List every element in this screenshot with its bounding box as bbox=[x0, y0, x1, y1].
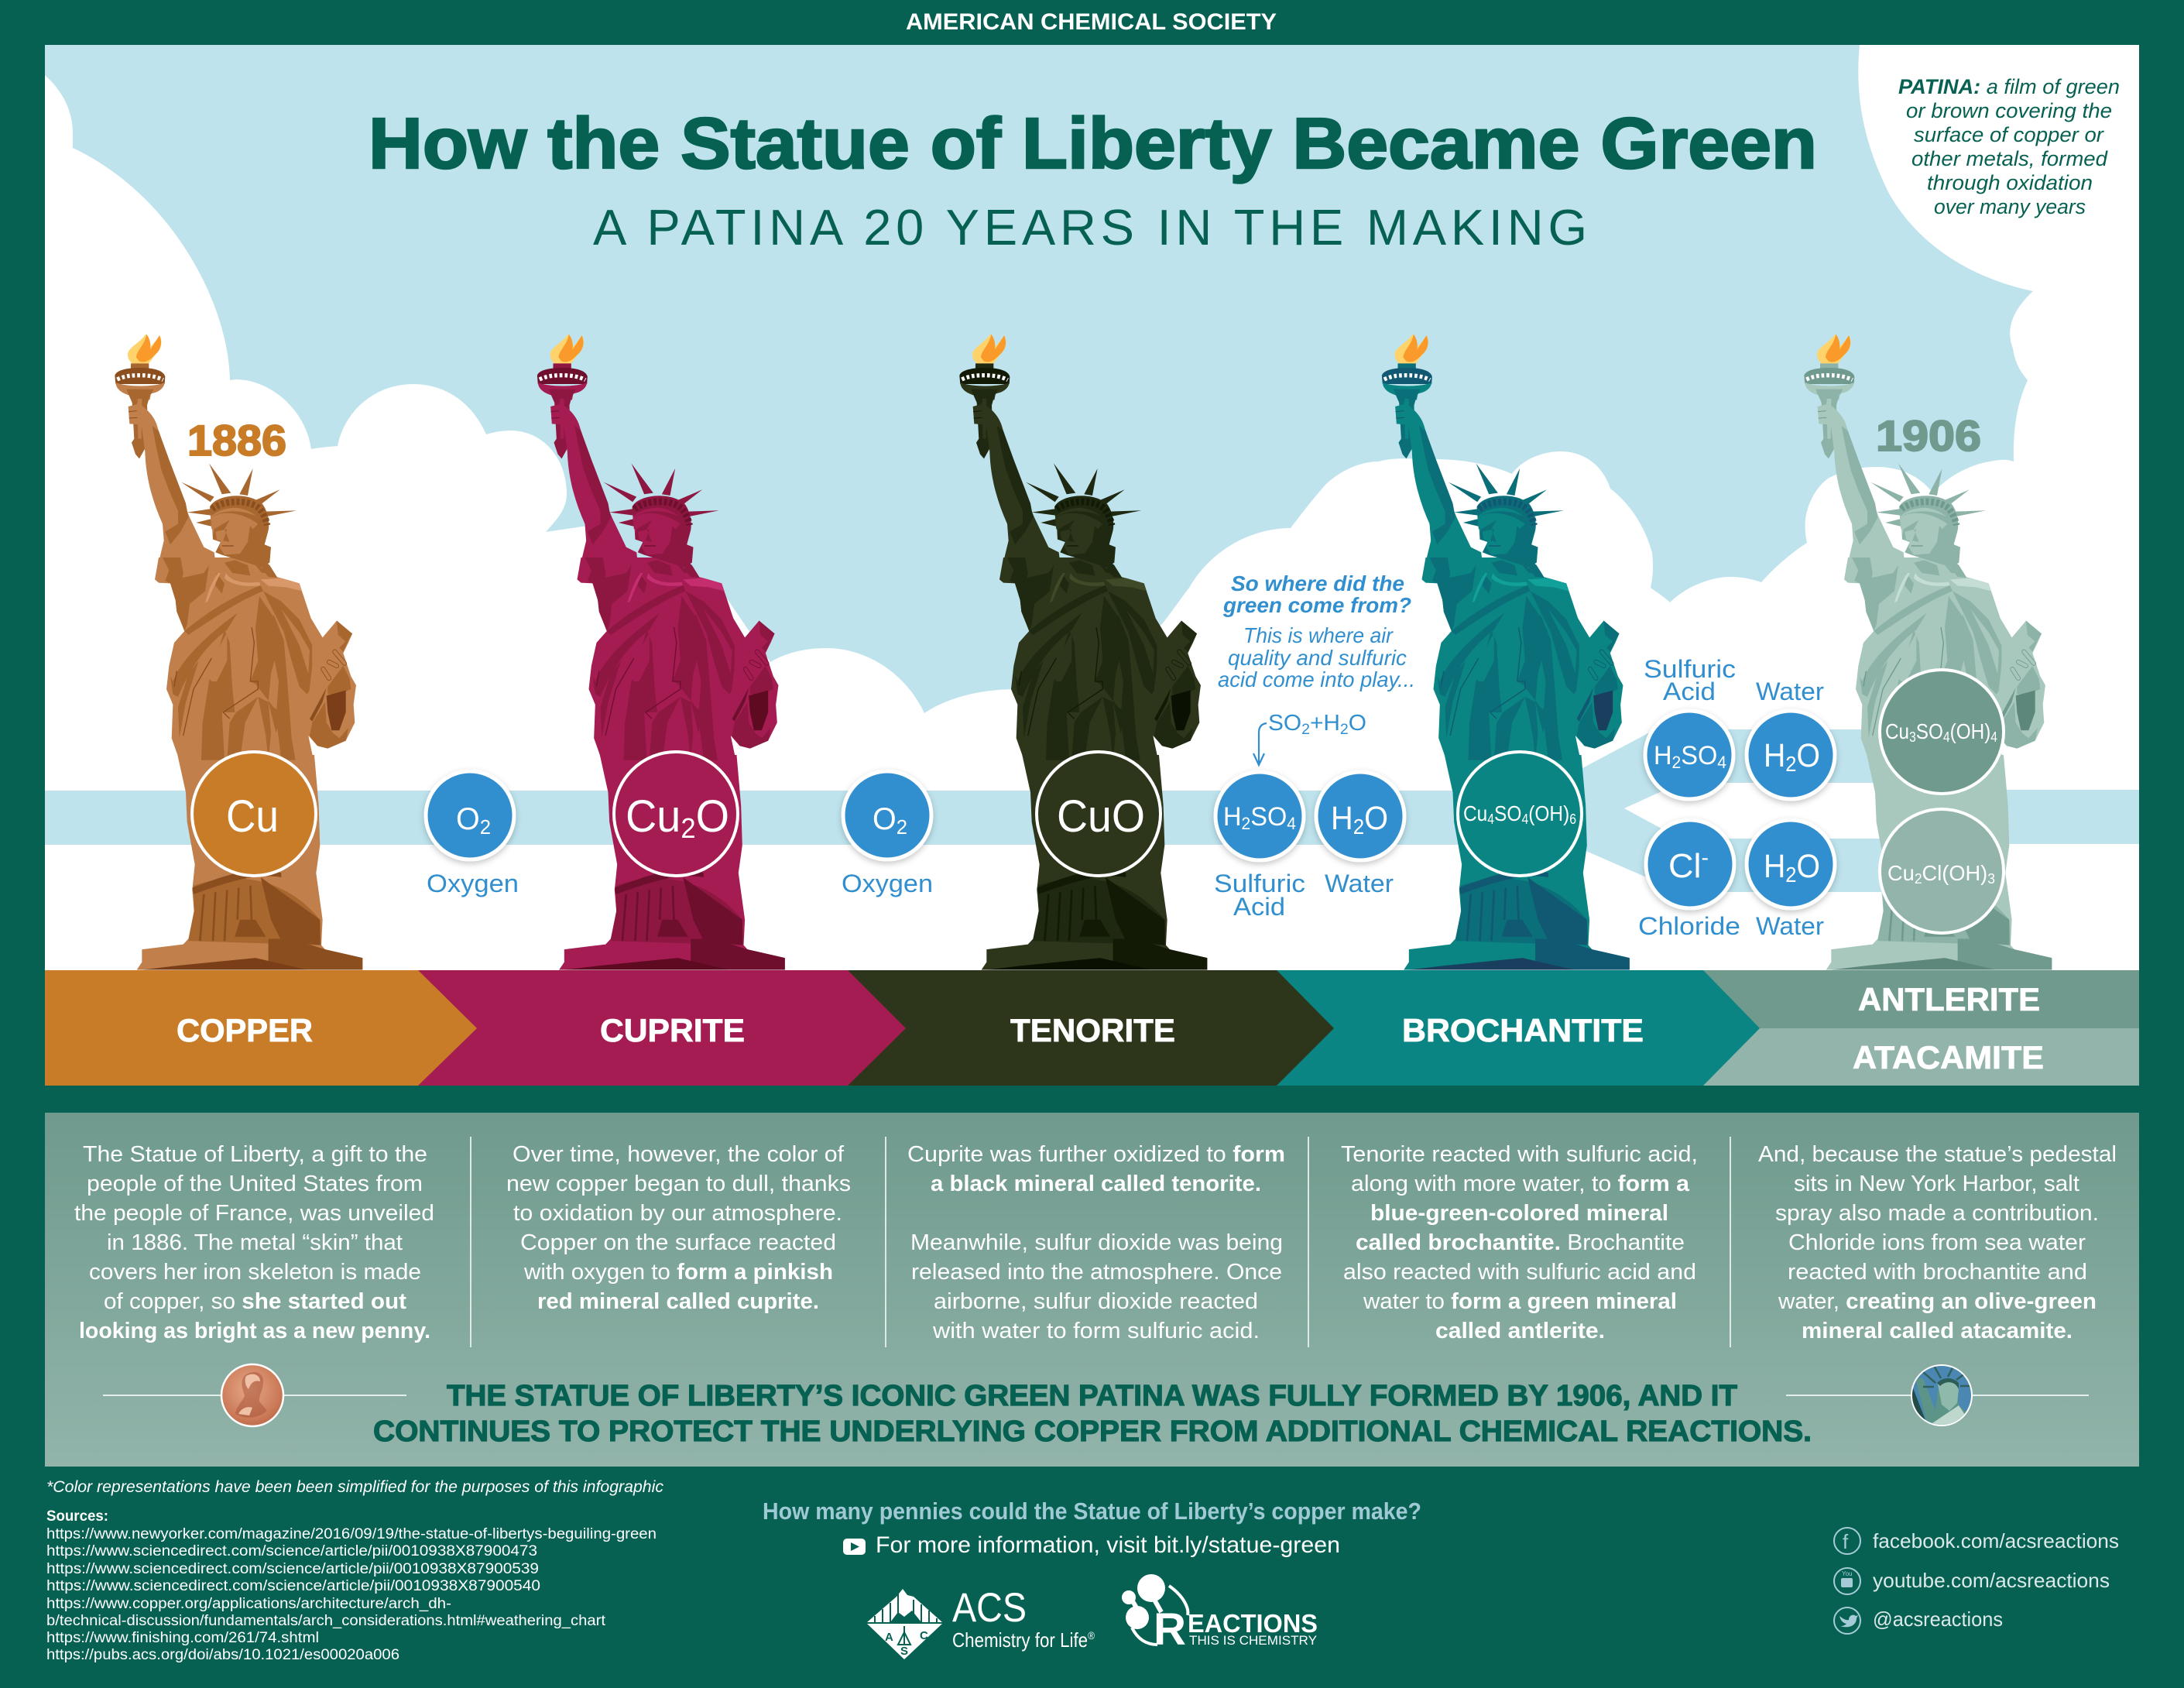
callout: where did the green come from: green come from? bbox=[1222, 593, 1411, 617]
text block: brochantite: Tenorite reacted with sulfuric acid, bbox=[1341, 1142, 1698, 1167]
reactants: chloride and water, lower: Chloride bbox=[1638, 912, 1740, 940]
reactant: oxygen 2 bbox=[842, 771, 933, 897]
element circle: Cu: Cu bbox=[226, 791, 279, 842]
logo: ACS: ® bbox=[1088, 1629, 1095, 1642]
logo: Reactions bbox=[1122, 1574, 1318, 1655]
sources: Sources: bbox=[46, 1508, 108, 1525]
year 1906: 1906 bbox=[1876, 411, 1981, 460]
title: How the Statue of Liberty Became Green bbox=[369, 103, 1817, 184]
text block: cuprite: to oxidation by our atmosphere. bbox=[513, 1201, 842, 1226]
element circle: atacamite formula: 2 bbox=[1915, 871, 1922, 887]
text block: atacamite: reacted with brochantite and bbox=[1788, 1260, 2087, 1285]
text block: brochantite: water to form a green mineral bbox=[1363, 1289, 1677, 1314]
element circle: brochantite formula: 4 bbox=[1521, 811, 1528, 827]
arrow: tenorite bbox=[813, 970, 1334, 1086]
text block: atacamite: Chloride ions from sea water bbox=[1788, 1230, 2086, 1255]
reactants: sulfuric acid and water: 2 bbox=[1242, 814, 1250, 833]
arrow: SO2 + H2O to sulfuric acid: O bbox=[1349, 711, 1366, 736]
callout: where did the green come from: acid come into play... bbox=[1218, 667, 1415, 691]
element circle: brochantite formula: SO bbox=[1494, 801, 1521, 825]
element circle: Cu2O: O bbox=[696, 791, 729, 842]
reactants: chloride and water, lower bbox=[1638, 820, 1835, 940]
reactants: sulfuric acid and water: 4 bbox=[1287, 814, 1296, 833]
logo: Reactions: THIS IS CHEMISTRY bbox=[1189, 1633, 1317, 1648]
text block: copper: looking as bright as a new penny. bbox=[79, 1319, 430, 1343]
reactants: sulfuric acid and water, upper: 2 bbox=[1785, 752, 1797, 776]
text block: tenorite: Meanwhile, sulfur dioxide was being bbox=[910, 1230, 1283, 1255]
arrow: cuprite bbox=[387, 970, 906, 1086]
reactants: sulfuric acid and water, upper: Water bbox=[1756, 678, 1824, 705]
icon: statue photo with rule bbox=[1786, 1364, 2089, 1426]
footnote: *Color representations have been been simplified for the purposes of this infographic bbox=[46, 1478, 663, 1496]
element circle: antlerite formula bbox=[1880, 670, 2004, 794]
element circle: CuO bbox=[1037, 752, 1161, 876]
reactants: sulfuric acid and water: H bbox=[1223, 802, 1243, 832]
element circle: atacamite formula: Cl(OH) bbox=[1922, 861, 1987, 885]
reactants: sulfuric acid and water, upper: H bbox=[1764, 737, 1788, 774]
reactants: chloride and water, lower: Cl bbox=[1668, 847, 1701, 885]
text block: copper: in 1886. The metal “skin” that bbox=[107, 1230, 403, 1255]
reactant: oxygen 2: O bbox=[873, 802, 897, 836]
reactants: chloride and water, lower: H bbox=[1764, 848, 1788, 885]
year 1886: 1886 bbox=[187, 416, 286, 465]
reactants: sulfuric acid and water, upper: Sulfuric bbox=[1644, 655, 1736, 683]
sources: https://www.finishing.com/261/74.shtml bbox=[46, 1630, 319, 1646]
text block: brochantite bbox=[1341, 1142, 1698, 1343]
text block: cuprite: with oxygen to form a pinkish bbox=[523, 1260, 833, 1285]
reactants: sulfuric acid and water, upper: Acid bbox=[1663, 678, 1716, 705]
callout: patina definition bbox=[1898, 75, 2120, 218]
statue: antlerite and atacamite bbox=[1804, 335, 2052, 969]
social: youtube: You bbox=[1842, 1570, 1852, 1577]
callout: patina definition: other metals, formed bbox=[1911, 147, 2108, 170]
reactants: sulfuric acid and water, upper: H bbox=[1654, 741, 1673, 770]
reactant: oxygen 1: O bbox=[456, 802, 480, 836]
conclusion statement bbox=[373, 1380, 1812, 1448]
more information link with play icon: For more information, visit bit.ly/statue-green bbox=[876, 1532, 1340, 1558]
text block: copper bbox=[74, 1142, 434, 1343]
text block: tenorite bbox=[907, 1142, 1285, 1343]
sources: b/technical-discussion/fundamentals/arch_considerations.html#weathering_chart bbox=[46, 1613, 606, 1629]
reactant: oxygen 1: 2 bbox=[480, 815, 491, 839]
conclusion statement: CONTINUES TO PROTECT THE UNDERLYING COPPER FROM ADDITIONAL CHEMICAL REACTIONS. bbox=[373, 1415, 1812, 1448]
text block: tenorite: airborne, sulfur dioxide reacted bbox=[934, 1289, 1258, 1314]
element circle: Cu2O: Cu bbox=[626, 791, 683, 842]
reactant: oxygen 1 bbox=[426, 771, 519, 897]
reactants: sulfuric acid and water, upper: SO bbox=[1681, 741, 1717, 770]
text block: brochantite: called antlerite. bbox=[1435, 1319, 1605, 1343]
logo: ACS: A bbox=[885, 1631, 893, 1644]
element circle: antlerite formula: Cu bbox=[1885, 719, 1913, 743]
reactants: sulfuric acid and water, upper: O bbox=[1797, 737, 1820, 774]
icon: penny with rule bbox=[103, 1364, 406, 1426]
callout: patina definition: PATINA: a film of green bbox=[1898, 75, 2120, 98]
element circle: brochantite formula bbox=[1458, 752, 1582, 876]
callout: where did the green come from: quality and sulfuric bbox=[1228, 646, 1407, 670]
statue: cuprite bbox=[537, 335, 785, 969]
callout: patina definition: surface of copper or bbox=[1914, 123, 2104, 146]
reactants: chloride and water, lower: Water bbox=[1756, 912, 1824, 940]
element circle: Cu2O: 2 bbox=[681, 812, 696, 844]
callout: patina definition: through oxidation bbox=[1927, 171, 2093, 194]
element circle: antlerite formula: SO bbox=[1916, 719, 1943, 743]
element circle: atacamite formula: Cu bbox=[1887, 861, 1915, 885]
text block: cuprite: Over time, however, the color of bbox=[513, 1142, 845, 1167]
label: CUPRITE: CUPRITE bbox=[600, 1012, 745, 1048]
sources: https://www.sciencedirect.com/science/article/pii/0010938X87900540 bbox=[46, 1578, 540, 1594]
callout: patina definition: over many years bbox=[1934, 195, 2086, 218]
arrow: SO2 + H2O to sulfuric acid: 2 bbox=[1301, 722, 1310, 738]
sources bbox=[46, 1508, 657, 1663]
reactants: sulfuric acid and water: H bbox=[1331, 800, 1355, 837]
element circle: Cu bbox=[192, 752, 316, 876]
panel: explanation bbox=[45, 1113, 2139, 1467]
logo: ACS: S bbox=[900, 1645, 908, 1658]
element circle: CuO: CuO bbox=[1057, 791, 1145, 842]
social: facebook: facebook.com/acsreactions bbox=[1873, 1529, 2119, 1552]
sources: https://www.sciencedirect.com/science/article/pii/0010938X87900539 bbox=[46, 1561, 539, 1577]
text block: tenorite: a black mineral called tenorite. bbox=[931, 1172, 1261, 1196]
sources: https://www.sciencedirect.com/science/article/pii/0010938X87900473 bbox=[46, 1543, 537, 1559]
text block: brochantite: blue-green-colored mineral bbox=[1370, 1201, 1668, 1226]
element circle: brochantite formula: 4 bbox=[1487, 811, 1494, 827]
reactants: sulfuric acid and water bbox=[1214, 772, 1404, 921]
text block: copper: people of the United States from bbox=[87, 1172, 423, 1196]
element circle: atacamite formula: 3 bbox=[1987, 871, 1995, 887]
logo: ACS bbox=[867, 1585, 1095, 1659]
reactant: oxygen 1: Oxygen bbox=[427, 870, 519, 897]
reactants: sulfuric acid and water: Acid bbox=[1233, 893, 1285, 921]
arrow: brochantite bbox=[1239, 970, 1760, 1086]
text block: brochantite: along with more water, to form a bbox=[1351, 1172, 1690, 1196]
sources: https://www.newyorker.com/magazine/2016/09/19/the-statue-of-libertys-beguiling-green bbox=[46, 1526, 657, 1542]
reactants: sulfuric acid and water: SO bbox=[1250, 802, 1287, 832]
text block: cuprite bbox=[506, 1142, 851, 1314]
reactant: oxygen 2: 2 bbox=[897, 815, 907, 839]
text block: tenorite: Cuprite was further oxidized to form bbox=[907, 1142, 1285, 1167]
arrow: SO2 + H2O to sulfuric acid: 2 bbox=[1340, 722, 1349, 738]
sources: https://pubs.acs.org/doi/abs/10.1021/es00020a006 bbox=[46, 1647, 399, 1663]
text block: brochantite: also reacted with sulfuric acid and bbox=[1343, 1260, 1696, 1285]
logo: ACS: Chemistry for Life bbox=[952, 1628, 1110, 1652]
reactants: sulfuric acid and water: Sulfuric bbox=[1214, 870, 1305, 897]
text block: copper: of copper, so she started out bbox=[104, 1289, 406, 1314]
call to action question: How many pennies could the Statue of Liberty’s copper make? bbox=[763, 1498, 1421, 1525]
callout: where did the green come from: This is where air bbox=[1243, 623, 1394, 647]
atmosphere band bbox=[45, 729, 2139, 892]
reactants: sulfuric acid and water: O bbox=[1364, 800, 1388, 837]
arrow: SO2 + H2O to sulfuric acid: +H bbox=[1310, 711, 1340, 736]
text block: tenorite: with water to form sulfuric acid. bbox=[932, 1319, 1260, 1343]
element circle: antlerite formula: (OH) bbox=[1950, 719, 1990, 743]
arrow band: mineral stages bbox=[45, 970, 2139, 1086]
arrow: SO2 + H2O to sulfuric acid bbox=[1253, 711, 1366, 765]
reactants: sulfuric acid and water, upper bbox=[1644, 655, 1835, 799]
label: COPPER: COPPER bbox=[177, 1012, 313, 1048]
social: youtube: youtube.com/acsreactions bbox=[1873, 1569, 2110, 1592]
element circle: brochantite formula: Cu bbox=[1463, 801, 1491, 825]
social: twitter bbox=[1834, 1607, 2003, 1634]
reactant: oxygen 2: Oxygen bbox=[842, 870, 933, 897]
text block: brochantite: called brochantite. Brochantite bbox=[1356, 1230, 1685, 1255]
text block: atacamite: mineral called atacamite. bbox=[1802, 1319, 2073, 1343]
element circle: brochantite formula: (OH) bbox=[1528, 801, 1569, 825]
subtitle: A PATINA 20 YEARS IN THE MAKING bbox=[593, 199, 1587, 256]
element circle: Cu2O bbox=[614, 752, 738, 876]
text block: atacamite: And, because the statue’s pedestal bbox=[1758, 1142, 2117, 1167]
reactants: chloride and water, lower: 2 bbox=[1785, 863, 1797, 887]
text block: atacamite: sits in New York Harbor, salt bbox=[1794, 1172, 2079, 1196]
logo: Reactions: EACTIONS bbox=[1188, 1609, 1318, 1638]
reactants: chloride and water, lower: O bbox=[1797, 848, 1820, 885]
logo: Reactions: R bbox=[1154, 1604, 1186, 1655]
logo: ACS: ACS bbox=[952, 1585, 1027, 1631]
callout: where did the green come from bbox=[1218, 571, 1415, 691]
text block: atacamite bbox=[1758, 1142, 2117, 1343]
statue: brochantite bbox=[1382, 335, 1630, 969]
header: American Chemical Society: AMERICAN CHEMICAL SOCIETY bbox=[906, 9, 1277, 35]
reactants: sulfuric acid and water, upper: 2 bbox=[1672, 753, 1681, 772]
label: BROCHANTITE: BROCHANTITE bbox=[1402, 1012, 1644, 1048]
callout: where did the green come from: So where did the bbox=[1231, 571, 1404, 595]
social: twitter: @acsreactions bbox=[1873, 1607, 2003, 1631]
text block: atacamite: spray also made a contribution. bbox=[1775, 1201, 2099, 1226]
element circle: antlerite formula: 3 bbox=[1909, 729, 1916, 745]
label: TENORITE: TENORITE bbox=[1010, 1012, 1175, 1048]
text block: copper: The Statue of Liberty, a gift to the bbox=[83, 1142, 427, 1167]
arrow: copper bbox=[45, 970, 477, 1086]
arrow: SO2 + H2O to sulfuric acid: SO bbox=[1268, 711, 1301, 736]
element circle: atacamite formula bbox=[1880, 809, 2004, 933]
panel: sky and clouds illustration bbox=[45, 45, 2139, 971]
logo: ACS: C bbox=[920, 1629, 928, 1642]
callout: patina definition: or brown covering the bbox=[1906, 99, 2112, 122]
conclusion statement: THE STATUE OF LIBERTY’S ICONIC GREEN PATINA WAS FULLY FORMED BY 1906, AND IT bbox=[447, 1380, 1737, 1412]
label: ATACAMITE: ATACAMITE bbox=[1853, 1039, 2044, 1076]
reactants: sulfuric acid and water: 2 bbox=[1353, 815, 1364, 839]
social: facebook: f bbox=[1843, 1530, 1849, 1553]
element circle: antlerite formula: 4 bbox=[1943, 729, 1950, 745]
text block: cuprite: Copper on the surface reacted bbox=[520, 1230, 836, 1255]
statue: copper bbox=[115, 335, 362, 969]
statue: tenorite bbox=[959, 335, 1207, 969]
element circle: antlerite formula: 4 bbox=[1990, 729, 1997, 745]
text block: cuprite: new copper began to dull, thanks bbox=[506, 1172, 851, 1196]
text block: copper: covers her iron skeleton is made bbox=[89, 1260, 421, 1285]
reactants: sulfuric acid and water, upper: 4 bbox=[1717, 753, 1726, 772]
text block: cuprite: red mineral called cuprite. bbox=[537, 1289, 819, 1314]
text block: copper: the people of France, was unveiled bbox=[74, 1201, 434, 1226]
reactants: chloride and water, lower: - bbox=[1701, 846, 1709, 870]
reactants: sulfuric acid and water: Water bbox=[1325, 870, 1394, 897]
text block: atacamite: water, creating an olive-green bbox=[1778, 1289, 2097, 1314]
element circle: brochantite formula: 6 bbox=[1569, 811, 1576, 827]
text block: tenorite: released into the atmosphere. Once bbox=[911, 1260, 1282, 1285]
sources: https://www.copper.org/applications/architecture/arch_dh- bbox=[46, 1596, 451, 1612]
label: ANTLERITE: ANTLERITE bbox=[1858, 981, 2040, 1017]
